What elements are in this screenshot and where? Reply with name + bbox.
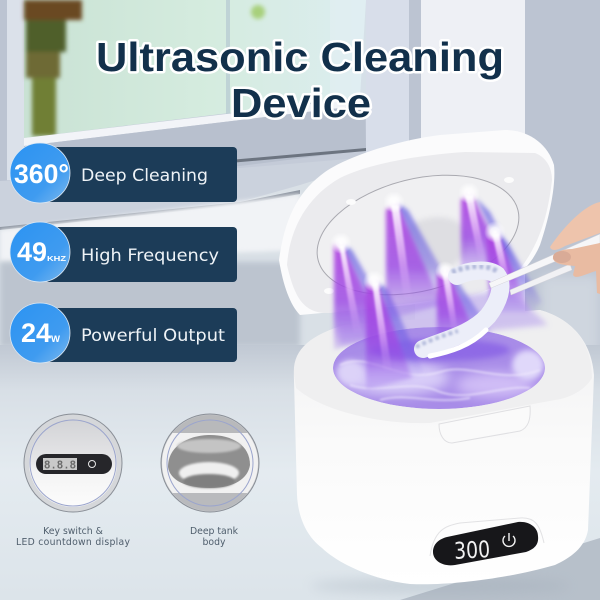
caption: key switch: LED countdown display (16, 537, 130, 548)
title (96, 34, 504, 126)
LED display panel (430, 518, 544, 565)
hand (550, 202, 600, 294)
window frame (0, 0, 420, 200)
detail inset: deep tank (160, 414, 260, 513)
device: ultrasonic cleaner (279, 130, 600, 594)
caption: deep tank: body (202, 537, 226, 548)
LED countdown digits: 300 (453, 537, 491, 565)
lid inner disc (305, 156, 531, 314)
device shadow (310, 578, 570, 594)
wall (415, 0, 527, 350)
power icon (503, 533, 515, 546)
UV light beams (330, 182, 542, 390)
lid screws (346, 199, 356, 205)
gap between lid and tub (335, 290, 548, 345)
mini power icon (88, 460, 96, 468)
window glass with garden (24, 0, 366, 138)
feature badge: 49 kHz high frequency: KHZ (47, 254, 67, 263)
caption: key switch (16, 526, 130, 548)
feature badge: 24 W powerful output: 24 (21, 318, 51, 348)
clear aligner held by tweezers (416, 266, 500, 356)
feature badge: 49 kHz high frequency (10, 222, 237, 282)
feature badge: 360 deep cleaning: Deep Cleaning (81, 166, 208, 185)
water in tank (333, 327, 545, 409)
window sill (24, 98, 365, 146)
feature badge: 24 W powerful output: W (51, 334, 61, 344)
detail inset: key switch and LED display (24, 414, 122, 512)
title: Device (231, 80, 371, 126)
mini display (36, 454, 112, 474)
caption: deep tank: Deep tank (190, 526, 239, 537)
title: Ultrasonic Cleaning (96, 34, 504, 80)
device body (294, 310, 594, 584)
feature badge: 24 W powerful output: Powerful Output (81, 326, 226, 345)
feature badge: 49 kHz high frequency: 49 (17, 237, 47, 267)
beam sparkles (330, 232, 352, 254)
lid (279, 130, 554, 315)
feature badge: 360 deep cleaning: 360° (14, 159, 69, 189)
feature badge: 360 deep cleaning (10, 143, 237, 203)
feature badge: 49 kHz high frequency: High Frequency (81, 246, 219, 265)
tweezers (489, 234, 600, 295)
tub latch (439, 406, 530, 443)
steel tank (168, 435, 250, 488)
feature badge: 24 W powerful output (10, 303, 237, 363)
caption: deep tank (190, 526, 239, 548)
table (0, 345, 600, 600)
body rim (294, 310, 592, 423)
detail inset: key switch and LED display: 8.8.8 (44, 458, 76, 472)
caption: key switch: Key switch & (43, 526, 103, 537)
